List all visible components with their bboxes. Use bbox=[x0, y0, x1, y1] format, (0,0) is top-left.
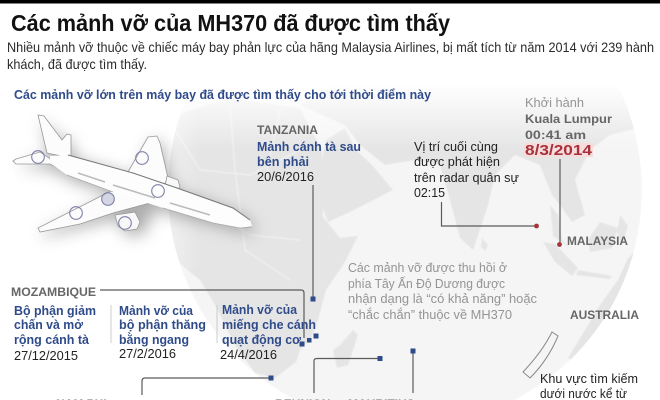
upper wing bbox=[128, 136, 168, 192]
intro text bbox=[7, 39, 654, 72]
horizontal stabilizer bbox=[13, 152, 62, 170]
callout: departure bbox=[524, 96, 612, 247]
debris markers bbox=[300, 334, 318, 346]
debris column 3: quạt động cơ bbox=[222, 333, 301, 347]
callout: last radar contact: Vị trí cuối cùng bbox=[414, 140, 498, 154]
label: Mauritius bbox=[348, 348, 416, 400]
callout: last radar contact: được phát hiện bbox=[414, 155, 500, 169]
label: Australia: AUSTRALIA bbox=[570, 308, 639, 322]
land: Madagascar bbox=[333, 330, 358, 368]
note: recovered debris bbox=[348, 261, 537, 322]
upper engine bbox=[165, 176, 180, 192]
lower engine bbox=[115, 212, 140, 231]
callout: last radar contact: trên radar quân sự bbox=[414, 171, 519, 185]
callout: last radar contact: 02:15 bbox=[414, 186, 445, 200]
debris column 2: Mảnh vỡ của bbox=[119, 304, 194, 318]
note: recovered debris: “chắc chắn” thuộc về MH370 bbox=[348, 307, 512, 322]
land: Asia bbox=[331, 113, 634, 250]
label: Tanzania bbox=[257, 123, 361, 302]
debris column 2 bbox=[119, 304, 206, 361]
label: Tanzania: Mảnh cánh tà sau bbox=[257, 140, 361, 154]
note: recovered debris: phía Tây Ấn Độ Dương được bbox=[348, 276, 505, 291]
debris column 3: 24/4/2016 bbox=[220, 348, 277, 362]
callout: departure: 8/3/2014 bbox=[525, 143, 592, 159]
note: recovered debris: Các mảnh vỡ được thu hồi ở bbox=[348, 261, 507, 275]
debris column 1: Bộ phận giảm bbox=[14, 304, 96, 318]
debris column 3: Mảnh vỡ của bbox=[222, 303, 298, 317]
callout: last radar contact bbox=[414, 140, 539, 228]
land: Australia bbox=[568, 254, 633, 360]
debris column 1: rộng cánh tà bbox=[14, 333, 89, 347]
note: recovered debris: nhận dạng là “có khả năng” hoặc bbox=[348, 292, 537, 306]
land: Sri Lanka bbox=[481, 239, 488, 250]
subheading: Các mảnh vỡ lớn trên máy bay đã được tìm thấy cho tới thời điểm này bbox=[14, 87, 432, 102]
callout: departure: 00:41 am bbox=[525, 128, 586, 142]
debris column 2: bộ phận thăng bbox=[119, 318, 206, 332]
intro text: khách, đã được tìm thấy. bbox=[7, 56, 147, 72]
plane shadow bbox=[17, 120, 256, 237]
debris column 1: 27/12/2015 bbox=[14, 349, 78, 363]
fuselage bbox=[50, 155, 252, 228]
land: Indonesia bbox=[576, 215, 628, 279]
debris column 1 bbox=[14, 304, 96, 363]
label: Tanzania: TANZANIA bbox=[257, 123, 318, 137]
land: Malay peninsula and Sumatra bbox=[543, 205, 578, 276]
callout: underwater search bbox=[540, 372, 638, 400]
lower wing bbox=[38, 190, 152, 232]
land: Arabia bbox=[316, 128, 393, 222]
label: Tanzania: 20/6/2016 bbox=[257, 170, 314, 184]
damage markers bbox=[32, 151, 164, 229]
label: Mozambique: MOZAMBIQUE bbox=[11, 285, 96, 299]
debris column 3: miếng che cánh bbox=[222, 318, 316, 332]
callout: departure: Khởi hành bbox=[525, 96, 584, 110]
title: Các mảnh vỡ của MH370 đã được tìm thấy bbox=[11, 10, 450, 36]
debris column 2: bằng ngang bbox=[119, 332, 189, 347]
airplane illustration bbox=[13, 115, 256, 237]
tail fin bbox=[38, 115, 71, 158]
debris column 2: 27/2/2016 bbox=[119, 347, 176, 361]
search area bbox=[523, 332, 558, 378]
label: Mozambique bbox=[11, 285, 304, 338]
label: Malaysia: MALAYSIA bbox=[567, 234, 628, 248]
callout: departure: Kuala Lumpur bbox=[525, 112, 612, 126]
land: Africa bbox=[169, 117, 358, 378]
callout: underwater search: Khu vực tìm kiếm bbox=[540, 372, 638, 386]
label: Tanzania: bên phải bbox=[257, 155, 309, 169]
top bar bbox=[0, 0, 660, 4]
label: South Africa bbox=[56, 376, 274, 400]
debris column 1: chấn và mở bbox=[14, 318, 83, 332]
globe map bbox=[168, 105, 642, 400]
label: Reunion bbox=[275, 356, 382, 400]
debris column 3 bbox=[220, 303, 316, 362]
